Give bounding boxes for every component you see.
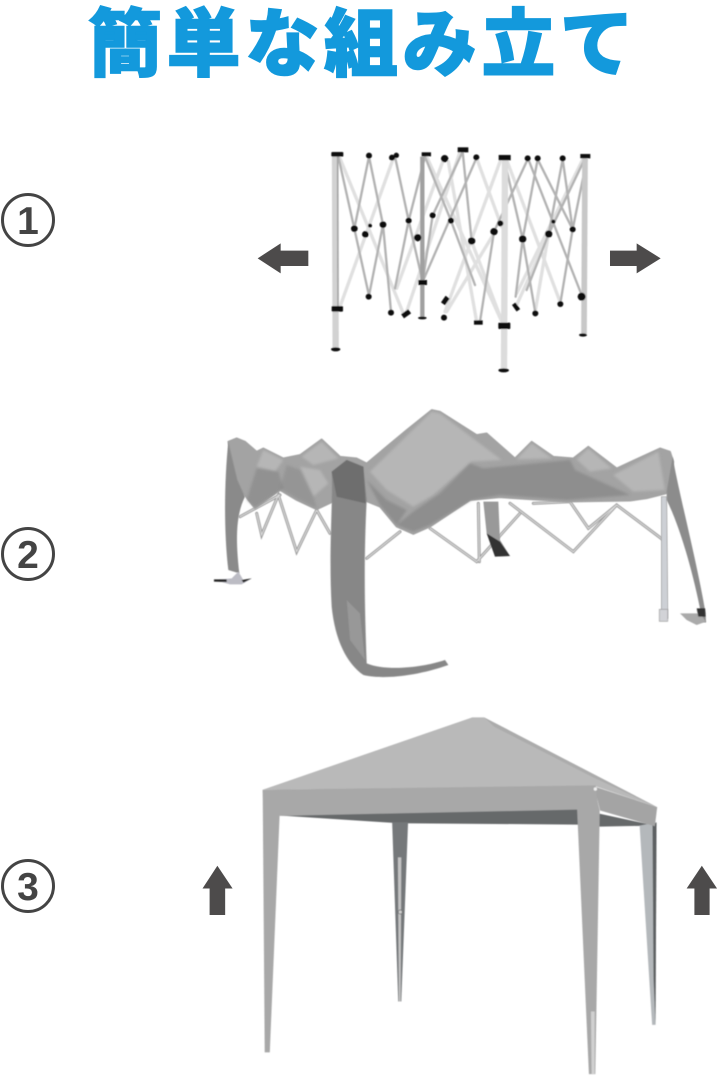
illustration: assembled tent xyxy=(263,717,657,1074)
title: 簡単な組み立て xyxy=(88,3,634,86)
step 3: fully assembled canopy with arrows xyxy=(203,717,717,1074)
canopy shaded folds xyxy=(247,460,630,532)
right pole xyxy=(661,497,668,618)
front valance xyxy=(263,785,598,821)
canopy body xyxy=(228,410,673,534)
step number 3: 3 xyxy=(17,866,39,909)
left corner drape xyxy=(225,442,245,573)
roof xyxy=(263,717,657,807)
step number 3 xyxy=(2,860,54,912)
light struts xyxy=(340,152,583,325)
poles xyxy=(335,157,585,370)
canopy lighter panels xyxy=(257,412,665,507)
step number 1: 1 xyxy=(17,200,39,243)
step number 2: 2 xyxy=(17,534,39,577)
struts under canopy xyxy=(240,495,663,562)
darker struts xyxy=(338,152,587,322)
back left leg xyxy=(392,822,408,1001)
step number 2 xyxy=(2,528,54,580)
joints xyxy=(331,147,590,372)
icon: left arrow xyxy=(258,243,308,273)
icon: left up arrow xyxy=(203,866,233,915)
icon: right arrow xyxy=(610,243,661,273)
front corner drape xyxy=(330,460,448,677)
feet xyxy=(214,572,706,625)
step 2: frame with canopy draped xyxy=(214,410,706,677)
back right leg xyxy=(640,822,657,1025)
back hanging drape xyxy=(483,502,510,557)
step number 1 xyxy=(2,194,54,246)
icon: right up arrow xyxy=(687,866,717,915)
step 1: collapsed frame with arrows xyxy=(258,147,661,372)
illustration: folding frame xyxy=(331,147,590,372)
side valance xyxy=(594,786,657,826)
front left leg xyxy=(263,790,280,1052)
front right leg xyxy=(577,786,600,1074)
dark underside xyxy=(280,809,655,827)
right corner drape xyxy=(667,457,706,623)
